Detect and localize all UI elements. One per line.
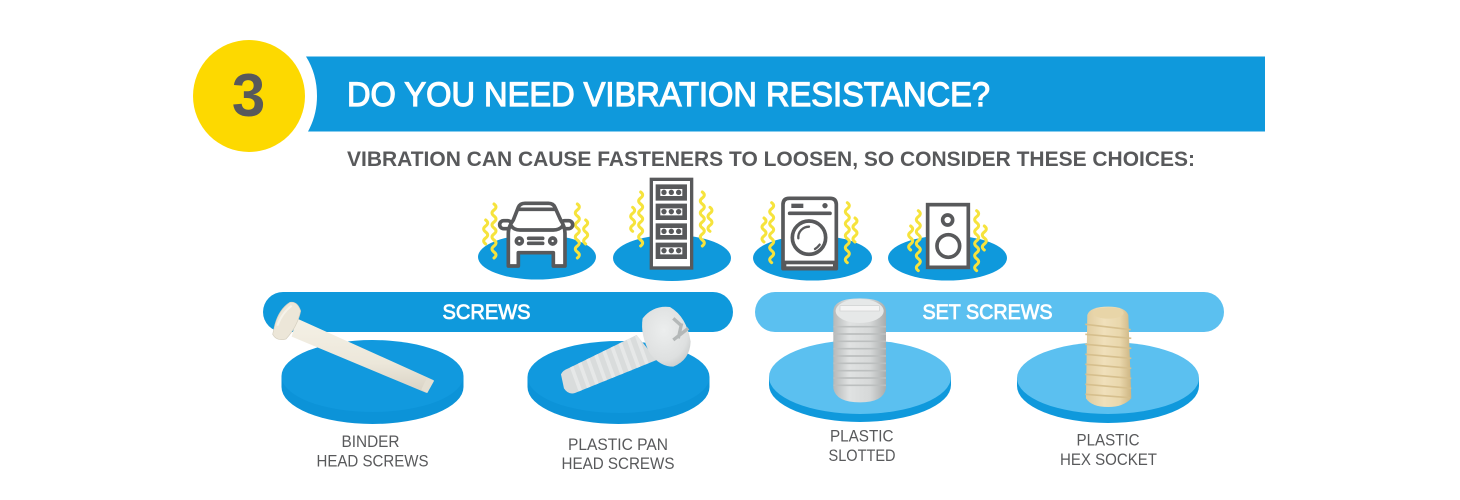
- panel: set screws category bar: [755, 292, 1224, 332]
- label: plastic slotted: [828, 426, 896, 465]
- icon: vibrating server rack: [613, 178, 731, 281]
- binder head screw on disc: [273, 302, 464, 424]
- label: plastic hex socket: HEX SOCKET: [1060, 450, 1157, 469]
- label: plastic hex socket: PLASTIC: [1076, 430, 1140, 450]
- label: plastic slotted: PLASTIC: [830, 426, 894, 446]
- panel: set screws category bar: SET SCREWS: [922, 301, 1052, 324]
- icon: vibrating speaker: [888, 205, 1007, 280]
- label: binder head screws: BINDER: [342, 432, 400, 451]
- label: plastic pan head screws: PLASTIC PAN: [568, 435, 668, 454]
- heading banner: [306, 56, 1265, 132]
- plastic hex socket set screw on disc: [1017, 307, 1199, 423]
- label: plastic slotted: SLOTTED: [828, 446, 896, 465]
- subtitle: VIBRATION CAN CAUSE FASTENERS TO LOOSEN, SO CONSIDER THESE CHOICES:: [347, 147, 1195, 171]
- panel: screws category bar: SCREWS: [442, 301, 530, 324]
- plastic pan head screw on disc: [528, 307, 710, 424]
- icon: vibrating car: [478, 203, 596, 280]
- plastic slotted set screw on disc: [769, 298, 951, 422]
- label: plastic pan head screws: HEAD SCREWS: [562, 454, 674, 473]
- panel: screws category bar: [263, 292, 733, 332]
- heading banner: DO YOU NEED VIBRATION RESISTANCE?: [347, 76, 990, 114]
- step number badge: 3: [232, 62, 265, 129]
- icon: vibrating washing machine: [753, 198, 872, 280]
- label: plastic hex socket: [1060, 430, 1157, 469]
- label: binder head screws: [316, 432, 428, 470]
- label: plastic pan head screws: [562, 435, 674, 473]
- label: binder head screws: HEAD SCREWS: [316, 452, 428, 470]
- step number badge: [193, 40, 305, 152]
